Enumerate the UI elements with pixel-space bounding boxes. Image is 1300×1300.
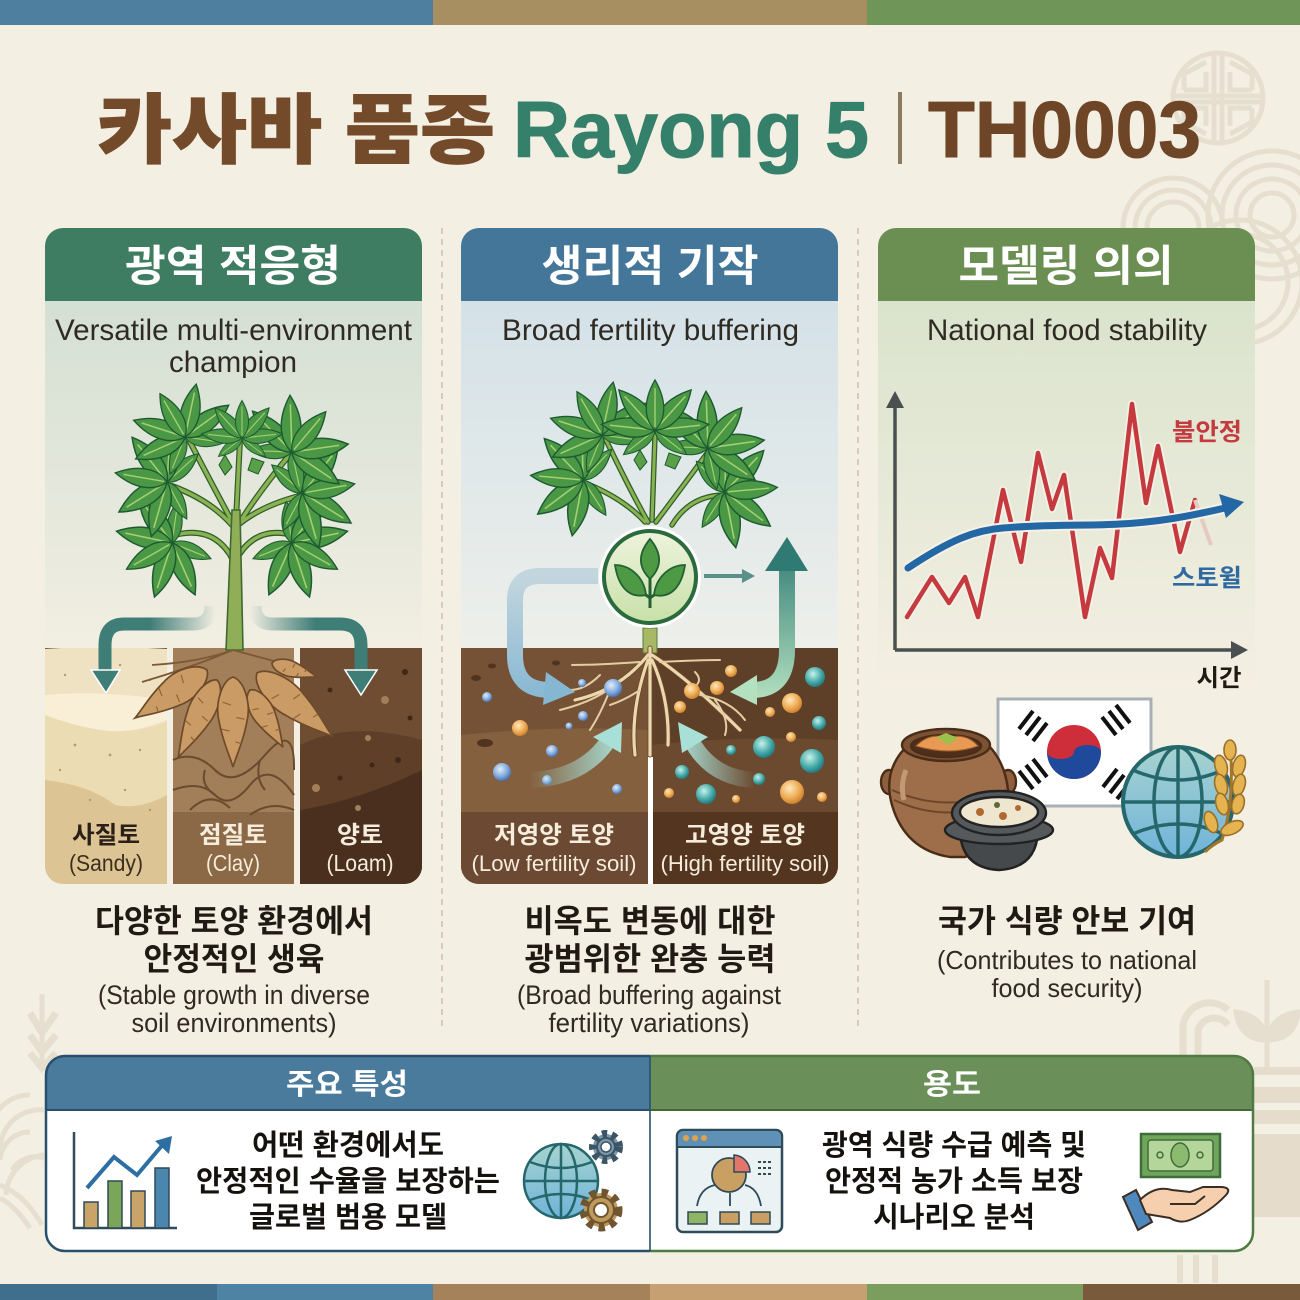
soil labels: (Sandy) — [69, 850, 143, 876]
caption — [517, 896, 781, 1038]
soil labels — [69, 815, 394, 876]
soil labels: 사질토 — [72, 815, 140, 850]
line chart: 시간 — [1196, 658, 1242, 693]
column dividers — [442, 228, 858, 1030]
icon: korean flag — [998, 699, 1151, 806]
heading: 용도: 용도 — [923, 1061, 981, 1103]
icon: leaf buffering circle — [599, 526, 701, 628]
arrow: high fertility up — [730, 537, 808, 705]
soil labels: 고영양 토양 — [685, 815, 805, 850]
icon: analysis window — [677, 1130, 782, 1232]
subtitle: Broad fertility buffering — [502, 314, 799, 347]
text: uses: 안정적 농가 소득 보장 — [825, 1158, 1083, 1200]
caption: (Contributes to national — [937, 945, 1197, 975]
caption: fertility variations) — [548, 1008, 750, 1038]
arrow: low fertility loop — [515, 576, 598, 705]
soil labels: (High fertility soil) — [660, 851, 830, 876]
soil — [461, 645, 838, 888]
icon: open hand — [1123, 1187, 1228, 1230]
header: 모델링 의의: 모델링 의의 — [958, 232, 1174, 294]
text: key traits: 어떤 환경에서도 — [252, 1122, 444, 1164]
header: 생리적 기작: 생리적 기작 — [542, 232, 758, 294]
soil labels — [472, 815, 830, 876]
title — [97, 69, 1201, 179]
caption: food security) — [992, 973, 1142, 1003]
arrow: to sandy — [91, 606, 211, 693]
nutrient particles — [482, 665, 827, 804]
caption: (Stable growth in diverse — [98, 980, 370, 1010]
caption: 국가 식량 안보 기여 — [938, 896, 1196, 942]
text: key traits: 글로벌 범용 모델 — [249, 1194, 447, 1236]
bottom card — [45, 1055, 1254, 1252]
text: uses — [822, 1122, 1086, 1236]
soil labels: 점질토 — [199, 815, 267, 850]
panel: modelling significance — [878, 228, 1255, 1003]
icon: globe and wheat — [1121, 740, 1248, 859]
caption — [95, 896, 373, 1038]
header: 모델링 의의 — [878, 228, 1255, 301]
soil columns — [45, 646, 422, 888]
icon: clay jar — [881, 729, 1016, 857]
arrow: uptake right — [678, 722, 755, 780]
text: uses: 시나리오 분석 — [873, 1194, 1035, 1236]
soil labels: 저영양 토양 — [494, 815, 614, 850]
cassava roots — [127, 650, 343, 767]
soil labels: (Clay) — [206, 850, 260, 876]
line chart — [886, 391, 1248, 693]
soil labels: 양토 — [337, 815, 383, 850]
text: uses: 광역 식량 수급 예측 및 — [822, 1122, 1086, 1164]
caption: soil environments) — [132, 1008, 336, 1038]
header: 광역 적응형: 광역 적응형 — [125, 232, 341, 294]
line chart: 불안정 — [1172, 412, 1242, 447]
caption: 안정적인 생육 — [144, 934, 324, 980]
subtitle: National food stability — [927, 314, 1207, 347]
text: key traits: 안정적인 수율을 보장하는 — [196, 1158, 500, 1200]
panel: versatile adaptation — [45, 228, 422, 1038]
subtitle: Versatile multi-environment — [55, 314, 413, 347]
background pot — [1254, 1067, 1300, 1217]
bottom colour band — [0, 1284, 1300, 1300]
icon: stone pot — [945, 791, 1053, 870]
plant — [526, 364, 786, 552]
icon: globe with gears — [524, 1134, 619, 1227]
top colour band — [0, 0, 1300, 25]
caption: 다양한 토양 환경에서 — [95, 896, 373, 942]
caption — [937, 896, 1197, 1003]
roots — [560, 628, 745, 755]
title: 카사바 품종 — [97, 69, 495, 179]
soil labels: (Loam) — [326, 850, 394, 876]
plant — [98, 366, 370, 650]
icon: growth chart — [74, 1132, 177, 1228]
icon: money — [1141, 1134, 1220, 1177]
header: 생리적 기작 — [461, 228, 838, 301]
caption: (Broad buffering against — [517, 980, 781, 1010]
arrow: centre to right — [704, 569, 755, 583]
arrow: uptake left — [530, 722, 622, 780]
line chart: 스토윌 — [1172, 558, 1242, 593]
header: 광역 적응형 — [45, 228, 422, 301]
heading: 주요 특성: 주요 특성 — [286, 1061, 408, 1103]
subtitle: champion — [169, 346, 297, 379]
panel: physiological mechanism — [461, 228, 838, 1038]
title: TH0003 — [928, 85, 1201, 174]
caption: 비옥도 변동에 대한 — [524, 896, 776, 942]
text: key traits — [196, 1122, 500, 1236]
soil labels: (Low fertility soil) — [472, 851, 636, 876]
title: Rayong 5 — [513, 85, 869, 174]
caption: 광범위한 완충 능력 — [524, 934, 776, 980]
subtitle — [55, 314, 413, 379]
arrow: to loam — [255, 606, 377, 695]
